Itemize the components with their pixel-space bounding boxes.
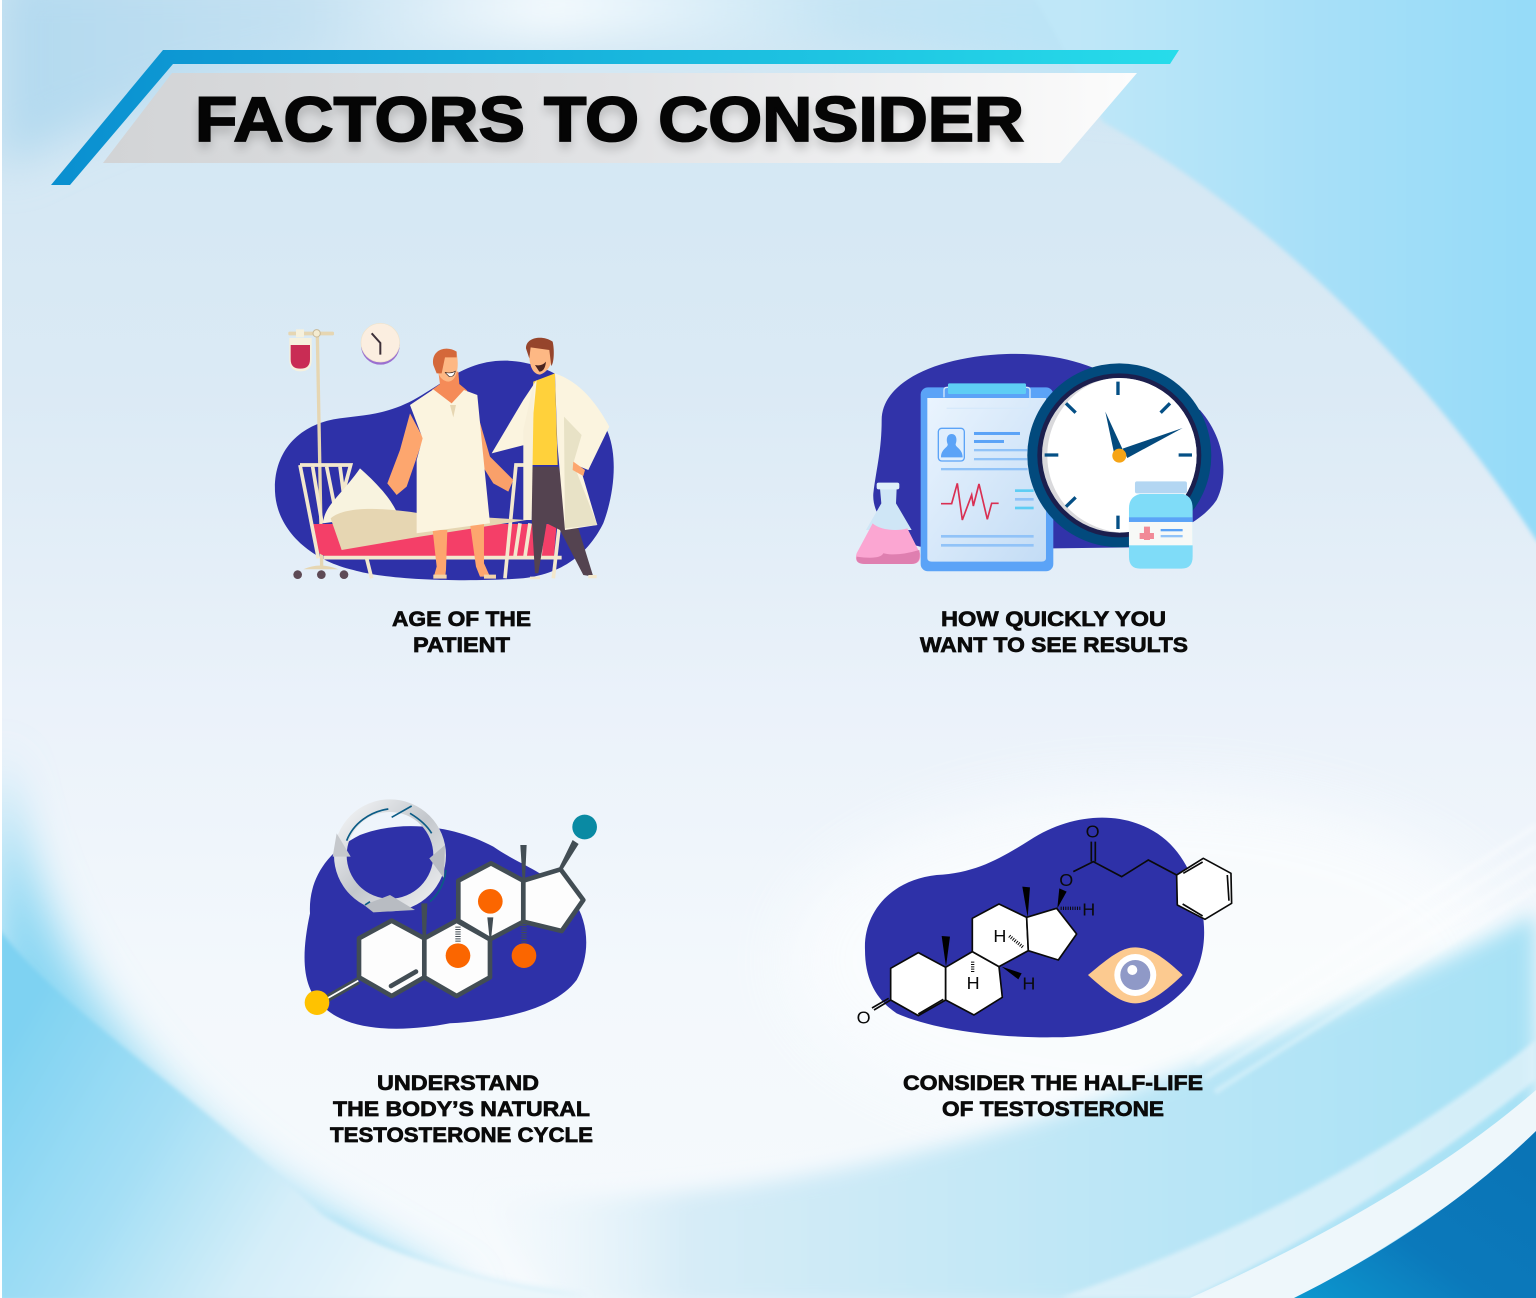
doctor	[492, 338, 609, 579]
upper streak band	[1198, 976, 1399, 1094]
hospital bed	[300, 465, 562, 578]
illustration: testosterone molecule and eye	[857, 818, 1232, 1037]
blue blob	[873, 354, 1223, 548]
patient	[387, 349, 513, 579]
pill bottle	[1129, 481, 1193, 569]
large clock	[1027, 363, 1211, 547]
molecule rings	[891, 858, 1232, 1016]
cycle arrows	[333, 799, 446, 912]
label	[920, 608, 1188, 657]
illustration: patient and doctor	[275, 323, 614, 580]
wall clock	[361, 323, 400, 365]
label: TESTOSTERONE CYCLE	[330, 1124, 593, 1147]
lower-left cyan glow	[0, 750, 470, 1298]
label: PATIENT	[413, 634, 510, 657]
atom labels: O	[1086, 821, 1100, 841]
label: OF TESTOSTERONE	[942, 1098, 1164, 1121]
eye icon	[1088, 947, 1183, 1003]
panel: age of the patient	[275, 323, 614, 657]
atom labels: H	[1022, 974, 1035, 994]
label: UNDERSTAND	[377, 1072, 539, 1095]
title: FACTORS TO CONSIDER	[195, 85, 1024, 155]
illustration: steroid rings and cycle	[305, 799, 597, 1029]
label: CONSIDER THE HALF-LIFE	[903, 1072, 1203, 1095]
orange nodes	[446, 889, 536, 968]
IV stand	[288, 329, 348, 579]
title ribbon	[51, 50, 1179, 185]
title banner: FACTORS TO CONSIDER	[195, 92, 1024, 162]
yellow node	[305, 990, 329, 1015]
atom labels: O	[1059, 870, 1073, 890]
blue blob	[865, 818, 1204, 1037]
label	[330, 1072, 593, 1147]
atom labels: O	[857, 1007, 871, 1027]
title plate	[103, 73, 1137, 163]
atom labels	[857, 821, 1100, 1027]
blue blob	[275, 361, 614, 580]
atom labels: H	[1082, 899, 1095, 919]
lower-right white sweep	[1190, 1090, 1536, 1298]
clipboard	[921, 383, 1053, 571]
blue blob	[305, 826, 586, 1029]
atom labels: H	[967, 973, 980, 993]
label: HOW QUICKLY YOU	[941, 608, 1166, 631]
patient card	[938, 428, 964, 461]
atom labels: H	[993, 926, 1006, 946]
corner	[1294, 1131, 1536, 1298]
flask	[856, 483, 920, 564]
title banner	[51, 50, 1179, 185]
teal node	[572, 815, 597, 839]
panel: understand the natural testosterone cycle	[305, 799, 597, 1147]
panel: how quickly you want to see results	[856, 354, 1223, 657]
label: THE BODY’S NATURAL	[333, 1098, 590, 1121]
label	[903, 1072, 1203, 1121]
lower-right wash	[480, 914, 1536, 1298]
label	[392, 608, 531, 657]
illustration: chart, clock, flask and bottle	[856, 354, 1223, 571]
label: AGE OF THE	[392, 608, 531, 631]
steroid skeleton	[359, 863, 583, 996]
label: WANT TO SEE RESULTS	[920, 634, 1188, 657]
panel: half-life of testosterone	[857, 818, 1232, 1121]
heart trace	[941, 483, 999, 520]
